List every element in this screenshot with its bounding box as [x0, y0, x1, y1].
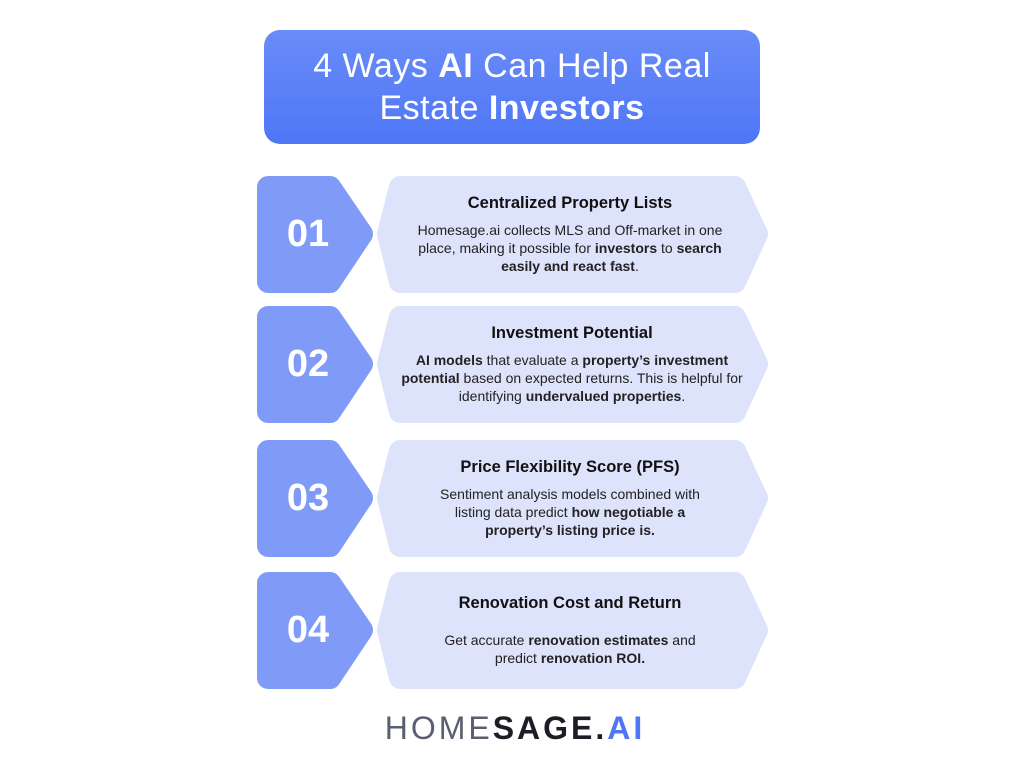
step 04 text: Renovation Cost and Return: [459, 594, 681, 612]
step 04 text: [444, 594, 696, 666]
step 01 text: Centralized Property Lists: [468, 194, 672, 212]
step 03 text: Sentiment analysis models combined with listing data predict how negotiable a property’s listing price is.: [440, 486, 700, 538]
logo: HOMESAGE.AI: [385, 710, 645, 746]
step 04 text: predict renovation ROI.: [495, 650, 645, 666]
step 03 text: [440, 458, 700, 538]
title: [264, 30, 760, 144]
step 02 text: Investment Potential: [491, 324, 653, 342]
step 01 number: 01: [287, 213, 329, 255]
step 02 text: [401, 324, 743, 404]
step 01 text: Homesage.ai collects MLS and Off-market in one place, making it possible for investors to search easily and react fast.: [418, 222, 722, 274]
step 02 number: 02: [287, 343, 329, 385]
step 04 text: Get accurate renovation estimates and: [444, 632, 696, 648]
step 03 text: Price Flexibility Score (PFS): [460, 458, 680, 476]
step 01 text: [418, 194, 722, 274]
step 03 number: 03: [287, 477, 329, 519]
step 02 text: AI models that evaluate a property’s investment potential based on expected returns. This is helpful for identifying undervalued properties.: [401, 352, 743, 404]
title: 4 Ways AI Can Help Real: [313, 47, 711, 85]
step 04 number: 04: [287, 609, 329, 651]
title: Estate Investors: [379, 89, 644, 127]
